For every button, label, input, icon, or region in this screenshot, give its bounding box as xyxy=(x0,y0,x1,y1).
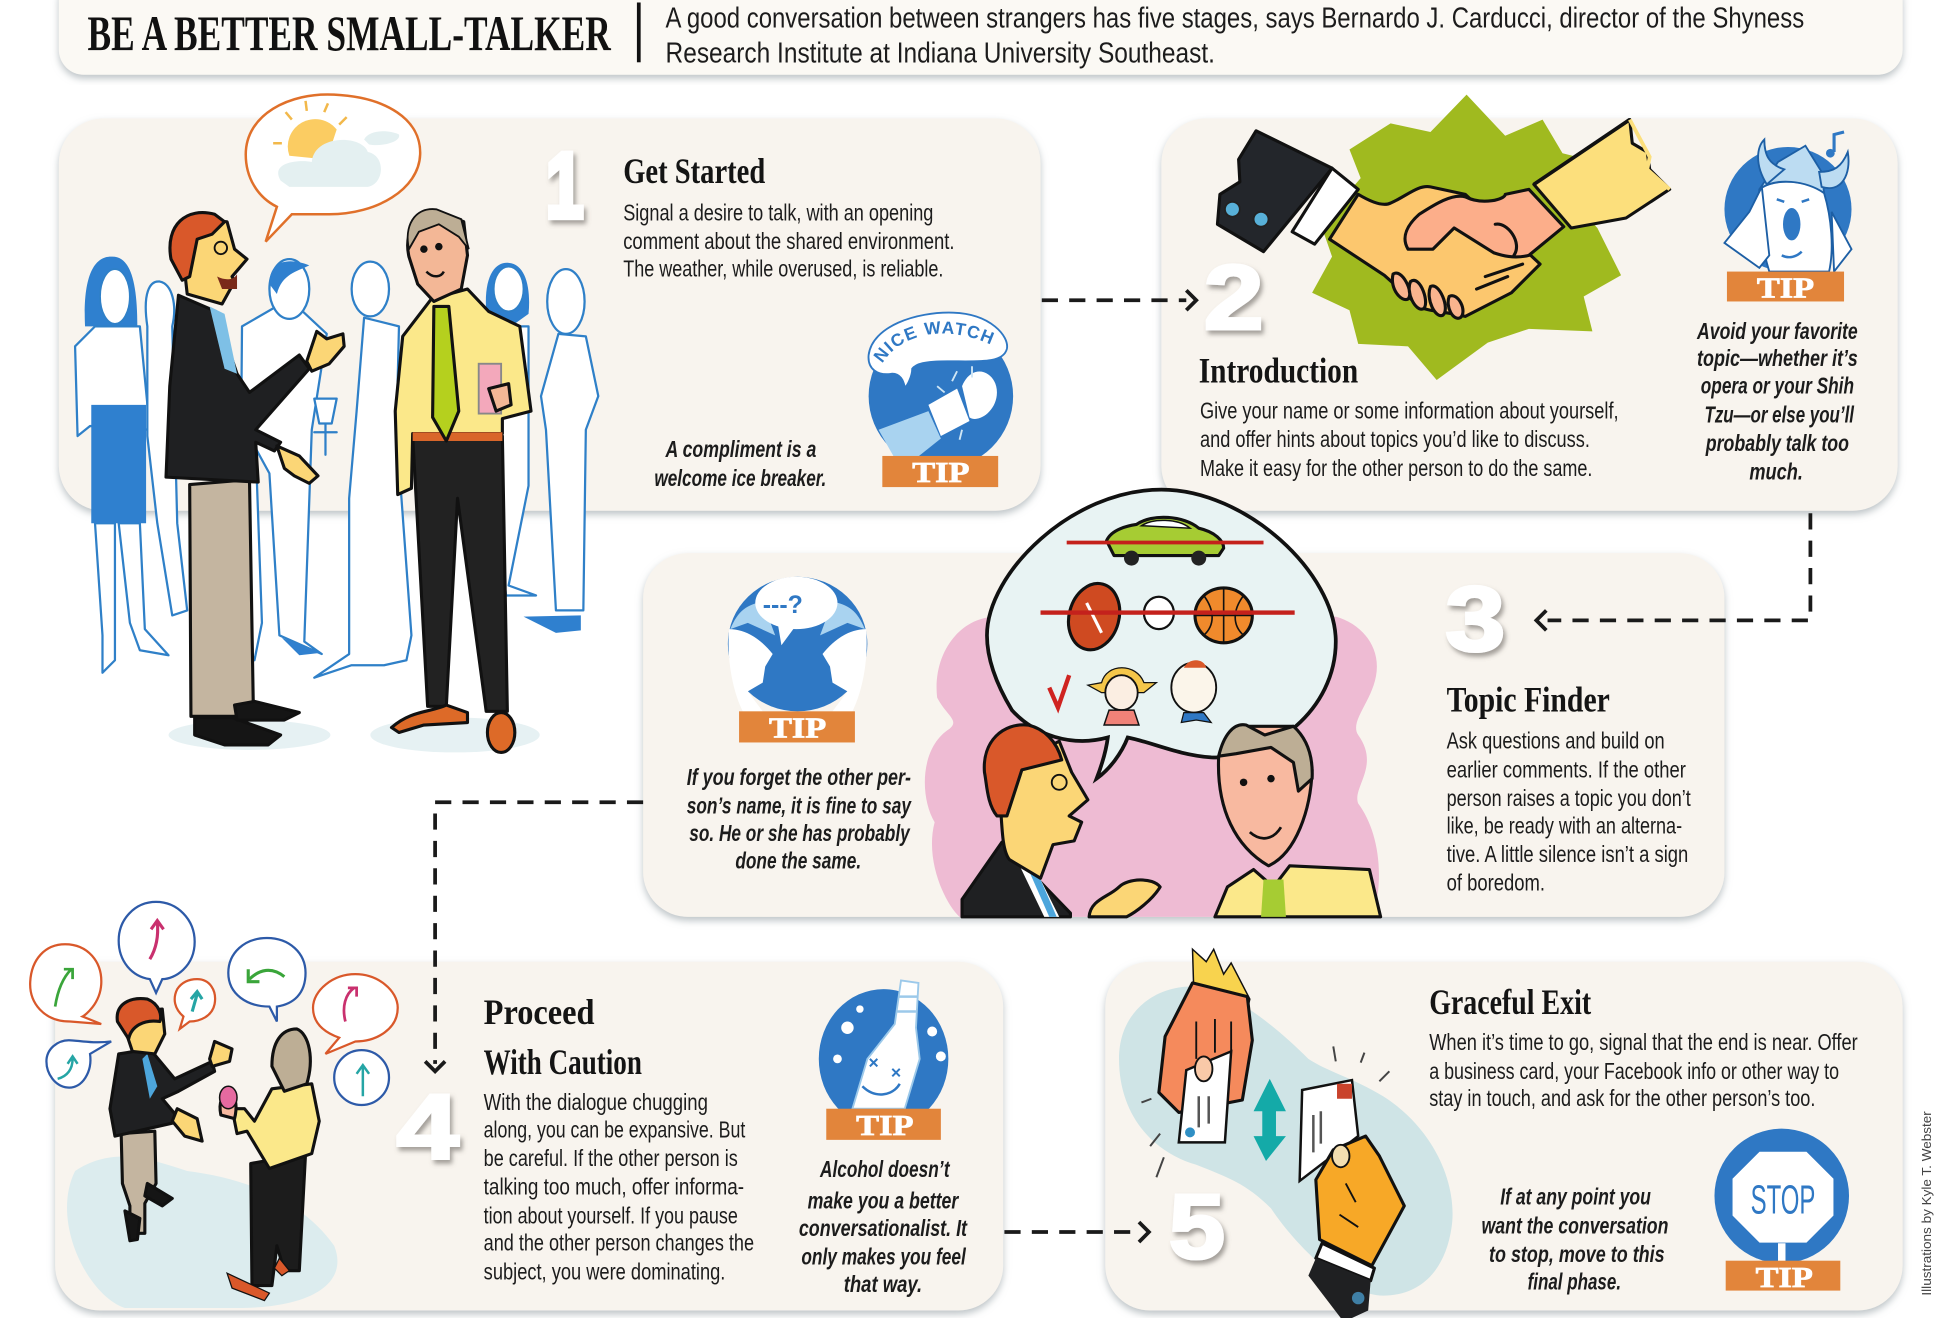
icon: forgot name tip: ---? xyxy=(763,591,803,619)
illustration: man in yellow shirt xyxy=(391,209,531,752)
header panel xyxy=(59,0,1903,75)
tip text: alcohol: conversationalist. It xyxy=(799,1215,968,1241)
body: topic finder: tive. A little silence isn’t a sign xyxy=(1447,841,1688,867)
body: topic finder: Ask questions and build on xyxy=(1447,728,1665,754)
illustration: crowd in background xyxy=(75,257,598,752)
icon: nice watch tip: TIP xyxy=(912,457,970,489)
car xyxy=(1067,517,1264,566)
man behind left xyxy=(146,281,187,615)
number 1: 1 xyxy=(546,134,583,237)
upper hand xyxy=(1159,949,1252,1142)
body: get started: comment about the shared environment. xyxy=(623,228,955,254)
panel 3 background xyxy=(643,553,1724,917)
tip text: forgot name: done the same. xyxy=(735,847,861,873)
basketball xyxy=(1195,588,1252,643)
football xyxy=(1061,578,1127,656)
arrow: step 3 to 4 xyxy=(425,802,643,1071)
body: introduction: Make it easy for the other person to do the same. xyxy=(1200,455,1592,481)
tip text: favorite topic: probably talk too xyxy=(1705,430,1849,456)
illustration: man in black suit xyxy=(166,213,344,745)
body: proceed with caution: along, you can be expansive. But xyxy=(484,1116,746,1142)
icon: bottle tip xyxy=(819,980,948,1142)
tip text: compliment: welcome ice breaker. xyxy=(654,465,826,491)
heading: proceed with caution: With Caution xyxy=(484,1042,642,1082)
teal double arrow xyxy=(1254,1079,1286,1161)
tip text: alcohol: make you a better xyxy=(808,1187,960,1213)
number 5: 5 xyxy=(1169,1175,1225,1278)
girl xyxy=(1088,668,1156,725)
icon: opera singer tip xyxy=(1724,132,1852,305)
icon: stop sign tip: TIP xyxy=(1756,1262,1813,1294)
number 2: 2 xyxy=(1204,246,1264,349)
illustration credit: Illustrations by Kyle T. Webster xyxy=(1919,1111,1934,1296)
body: get started: The weather, while overused, is reliable. xyxy=(623,256,943,282)
man left, red hair xyxy=(962,725,1160,917)
woman at right xyxy=(486,263,536,595)
tip text: favorite topic: much. xyxy=(1749,459,1803,485)
tip text: alcohol: Alcohol doesn’t xyxy=(819,1156,951,1182)
body: topic finder: like, be ready with an alterna- xyxy=(1447,812,1682,838)
body: proceed with caution: tion about yourself. If you pause xyxy=(484,1202,738,1228)
illustration: two men with topic bubble xyxy=(925,490,1381,917)
number 4: 4 xyxy=(396,1076,459,1179)
icon: bottle tip: TIP xyxy=(856,1110,913,1142)
body: proceed with caution: and the other person changes the xyxy=(484,1230,754,1256)
right man xyxy=(220,1029,319,1301)
man right, yellow shirt xyxy=(1215,725,1381,917)
heading: graceful exit: Graceful Exit xyxy=(1429,982,1591,1022)
body: proceed with caution: subject, you were dominating. xyxy=(484,1258,725,1284)
tip text: alcohol: only makes you feel xyxy=(801,1243,966,1269)
tip text: favorite topic: topic—whether it’s xyxy=(1697,345,1858,371)
intro text: Research Institute at Indiana University Southeast. xyxy=(666,37,1215,69)
tip text: stop: final phase. xyxy=(1528,1268,1621,1294)
tip text: favorite topic: Tzu—or else you’ll xyxy=(1705,401,1854,427)
tip text: compliment: A compliment is a xyxy=(665,436,816,462)
boy xyxy=(1171,660,1216,723)
body: proceed with caution: With the dialogue chugging xyxy=(484,1089,708,1115)
heading: get started: Get Started xyxy=(623,151,765,191)
arrow: step 1 to 2 xyxy=(1042,290,1196,310)
arrow: step 2 to 3 xyxy=(1536,513,1810,630)
tip text: stop: to stop, move to this xyxy=(1489,1241,1665,1267)
man seen from behind xyxy=(314,262,411,678)
body: introduction: and offer hints about topics you’d like to discuss. xyxy=(1200,426,1590,452)
body: proceed with caution: be careful. If the other person is xyxy=(484,1145,738,1171)
number 3: 3 xyxy=(1445,567,1505,670)
woman in blue skirt xyxy=(75,257,169,673)
body: topic finder: person raises a topic you don’t xyxy=(1447,785,1691,811)
heading: introduction: Introduction xyxy=(1199,350,1358,390)
icon: nice watch tip xyxy=(868,312,1014,489)
tip text: forgot name: son’s name, it is fine to say xyxy=(687,792,912,818)
heading: proceed with caution: Proceed xyxy=(484,992,595,1032)
heading: topic finder: Topic Finder xyxy=(1447,679,1610,719)
panel 5 background xyxy=(1105,962,1903,1311)
body: introduction: Give your name or some information about yourself, xyxy=(1200,398,1619,424)
illustration: exchanging business cards xyxy=(1119,949,1453,1318)
body: proceed with caution: talking too much, offer informa- xyxy=(484,1174,744,1200)
tip text: favorite topic: Avoid your favorite xyxy=(1696,318,1858,344)
tip text: stop: If at any point you xyxy=(1500,1184,1651,1210)
body: topic finder: of boredom. xyxy=(1447,870,1545,896)
baseball xyxy=(1144,597,1174,629)
icon: forgot name tip: TIP xyxy=(769,712,826,744)
icon: stop sign tip xyxy=(1714,1129,1849,1294)
tip text: stop: want the conversation xyxy=(1482,1212,1668,1238)
tip text: forgot name: If you forget the other per- xyxy=(687,764,911,790)
title: BE A BETTER SMALL-TALKER xyxy=(88,6,611,61)
topic speech bubble xyxy=(987,490,1336,779)
check mark xyxy=(1049,675,1069,708)
icon: stop sign tip: STOP xyxy=(1751,1176,1815,1222)
man with wine glass xyxy=(240,259,337,660)
weather speech bubble xyxy=(246,94,420,242)
icon: nice watch tip: NICE WATCH xyxy=(873,321,994,363)
lower hand xyxy=(1300,1080,1404,1318)
panel 4 background xyxy=(55,962,1003,1311)
arrow: step 4 to 5 xyxy=(1004,1222,1149,1242)
panel 1 background xyxy=(59,118,1041,511)
icon: forgot name tip xyxy=(728,577,867,744)
tip text: forgot name: so. He or she has probably xyxy=(689,820,911,846)
body: graceful exit: When it’s time to go, signal that the end is near. Offer xyxy=(1429,1029,1858,1055)
panel 2 background xyxy=(1161,118,1898,511)
icon: opera singer tip: TIP xyxy=(1757,273,1814,305)
illustration: two men with arrow bubbles xyxy=(30,902,398,1308)
arrow bubbles xyxy=(30,902,398,1105)
tip text: alcohol: that way. xyxy=(844,1271,922,1297)
body: graceful exit: a business card, your Facebook info or other way to xyxy=(1429,1058,1839,1084)
body: graceful exit: stay in touch, and ask for the other person’s too. xyxy=(1429,1085,1815,1111)
left man xyxy=(110,999,232,1241)
body: get started: Signal a desire to talk, with an opening xyxy=(623,199,933,225)
illustration: handshake xyxy=(1217,95,1670,380)
body: topic finder: earlier comments. If the other xyxy=(1447,756,1686,782)
bald man at right xyxy=(524,269,598,633)
tip text: favorite topic: opera or your Shih xyxy=(1701,373,1854,399)
